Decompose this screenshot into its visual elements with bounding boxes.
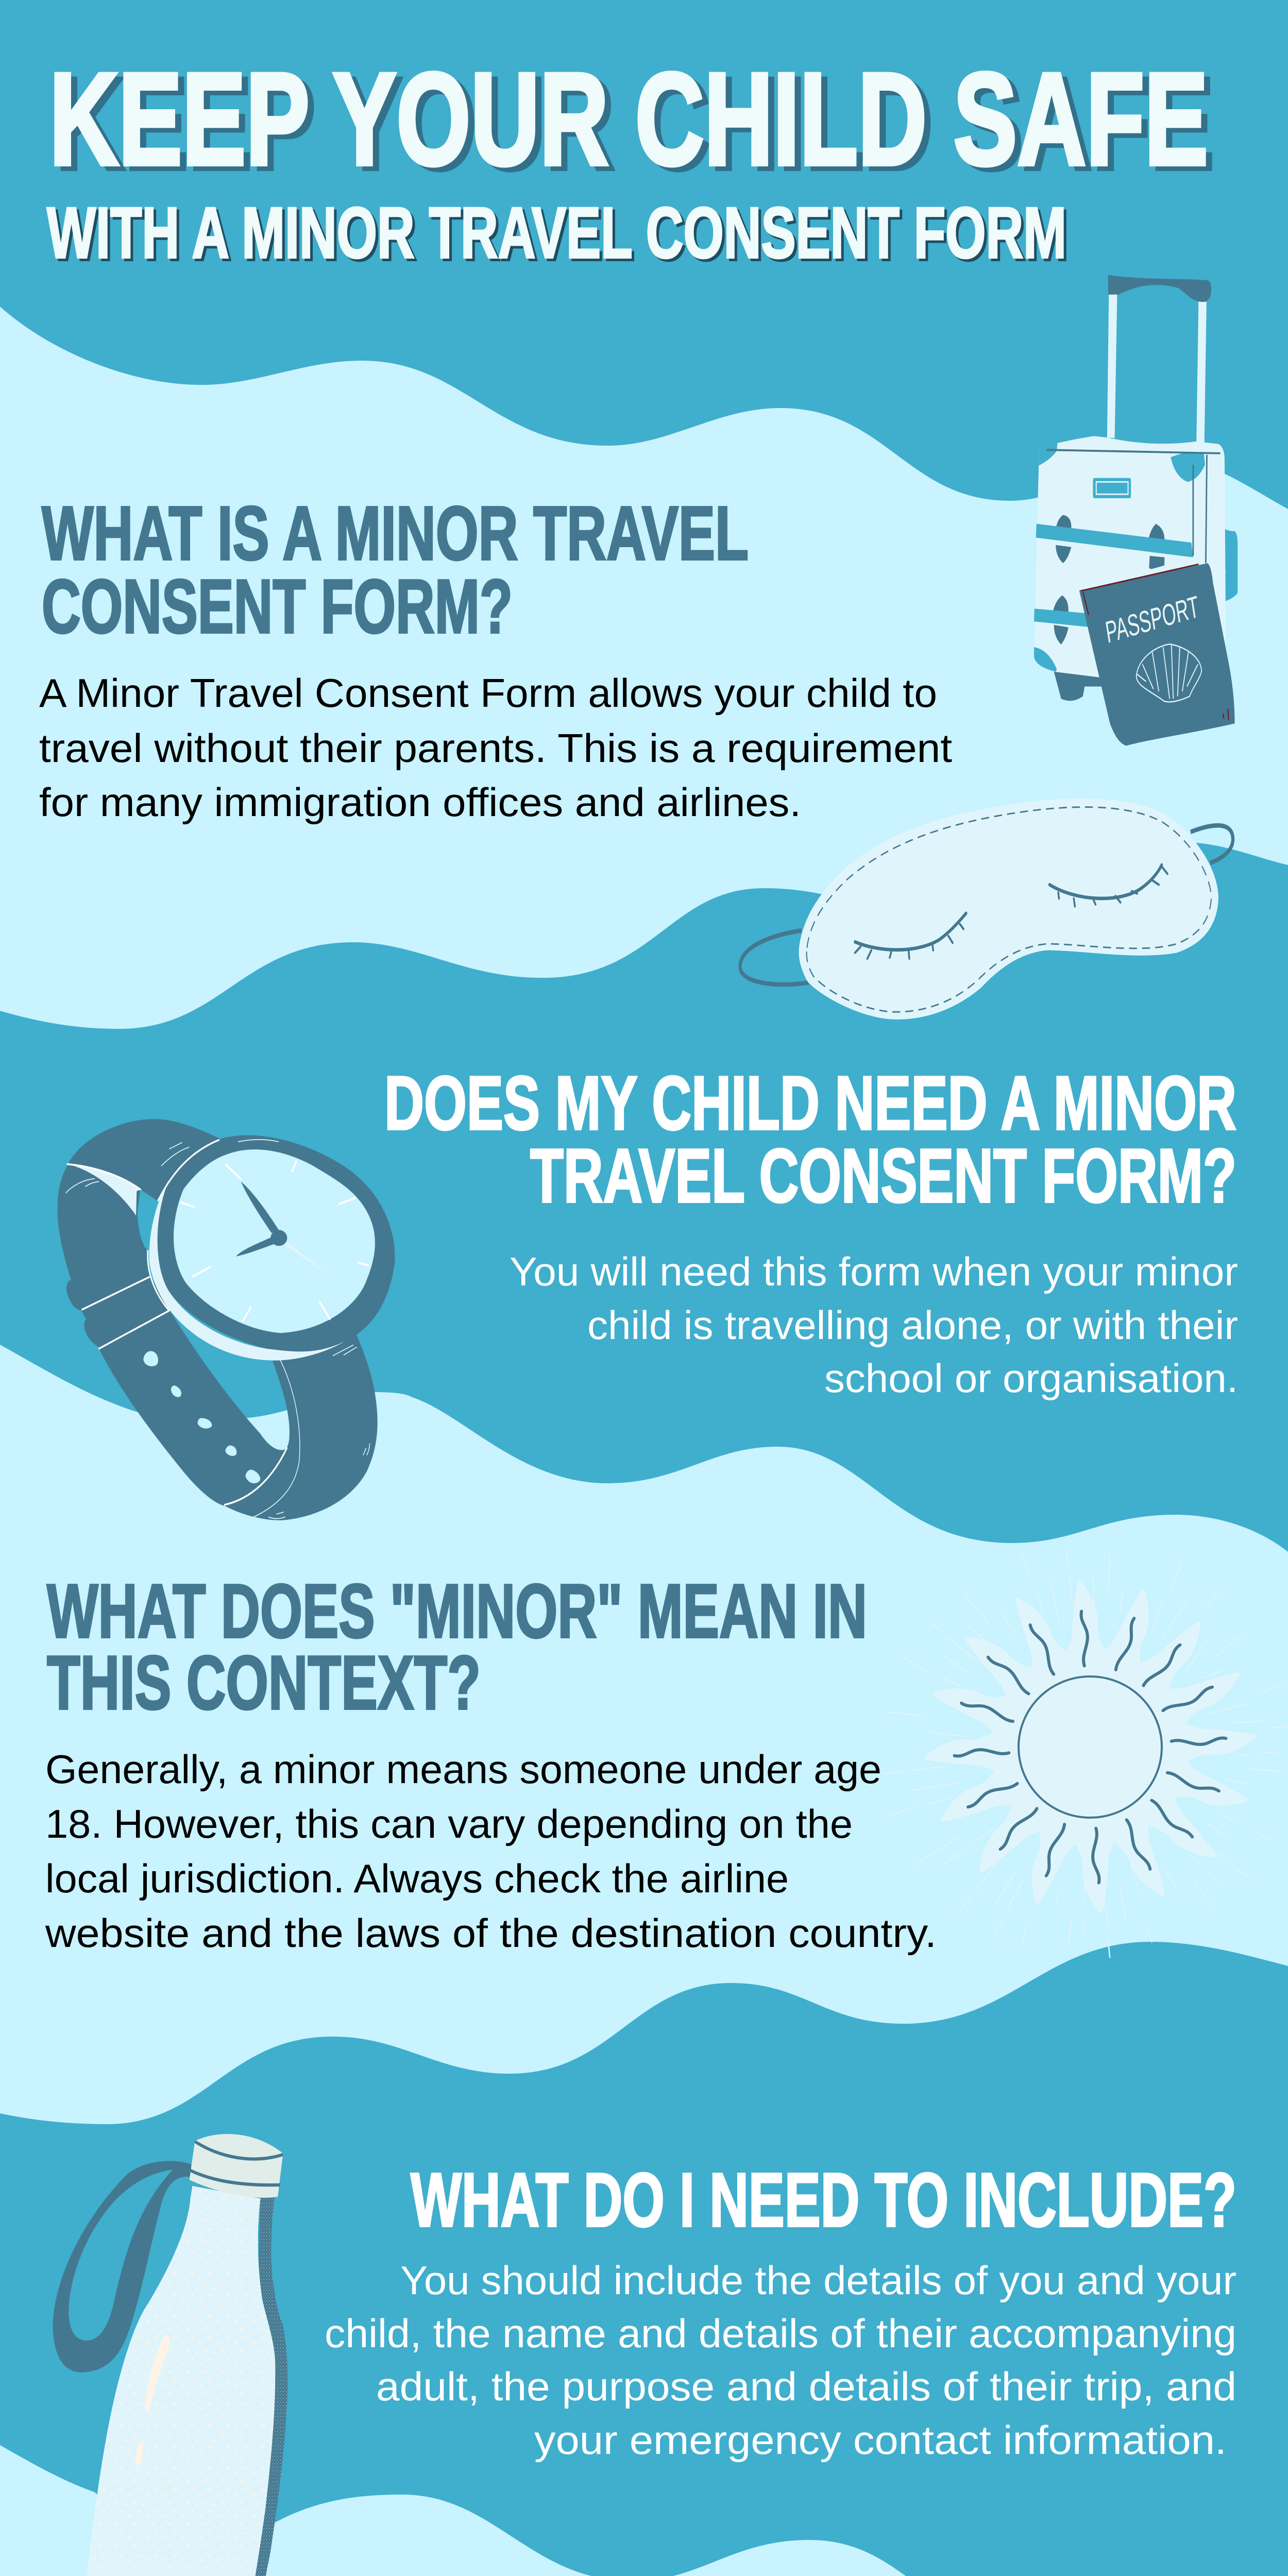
icon: wristwatch [57,1119,395,1520]
heading [384,1061,1236,1218]
body text: A Minor Travel Consent Form allows your child to [39,670,937,716]
wave band: dark section 4 [0,1942,1288,2576]
body text [510,1249,1238,1401]
icon: water bottle [53,2134,287,2576]
panel: what do I need to include [325,2158,1236,2463]
body text: child is travelling alone, or with their [587,1302,1238,1348]
body text: Generally, a minor means someone under age [45,1747,882,1792]
body text: for many immigration offices and airlines. [39,779,801,825]
panel: what does minor mean [45,1569,937,1956]
body text: local jurisdiction. Always check the airline [45,1856,789,1901]
icon: suitcase with passport: PASSPORT [1104,590,1201,650]
body text: your emergency contact information. [534,2417,1227,2463]
body text: You will need this form when your minor [510,1249,1238,1294]
wave band: light section 3 [0,1345,1288,2164]
heading [42,491,749,649]
heading: THIS CONTEXT? [47,1640,481,1725]
panel: what is a minor travel consent form [39,491,952,825]
body text: website and the laws of the destination country. [45,1910,937,1956]
panel: does my child need a form [384,1061,1238,1401]
body text: child, the name and details of their accompanying [325,2311,1236,2356]
body text: adult, the purpose and details of their trip, and [376,2364,1236,2409]
heading: WHAT DOES "MINOR" MEAN IN [47,1569,867,1654]
heading: CONSENT FORM? [42,564,513,649]
icon: sun [883,1549,1288,1957]
body text: school or organisation. [824,1355,1238,1401]
heading: WHAT IS A MINOR TRAVEL [42,491,749,576]
heading [47,1569,867,1725]
wave band: light section 1 [0,307,1288,1082]
body text: You should include the details of you and your [400,2258,1236,2303]
body text: 18. However, this can vary depending on the [45,1801,853,1846]
body text [39,670,952,825]
body text [45,1747,937,1956]
icon: suitcase with passport [1034,275,1238,745]
body text [325,2258,1236,2463]
body text: travel without their parents. This is a requirement [39,725,952,771]
wave band: light section 5 [0,2445,1288,2576]
icon: sleep mask [740,799,1233,1020]
wave band: dark section 2 [0,842,1288,1597]
